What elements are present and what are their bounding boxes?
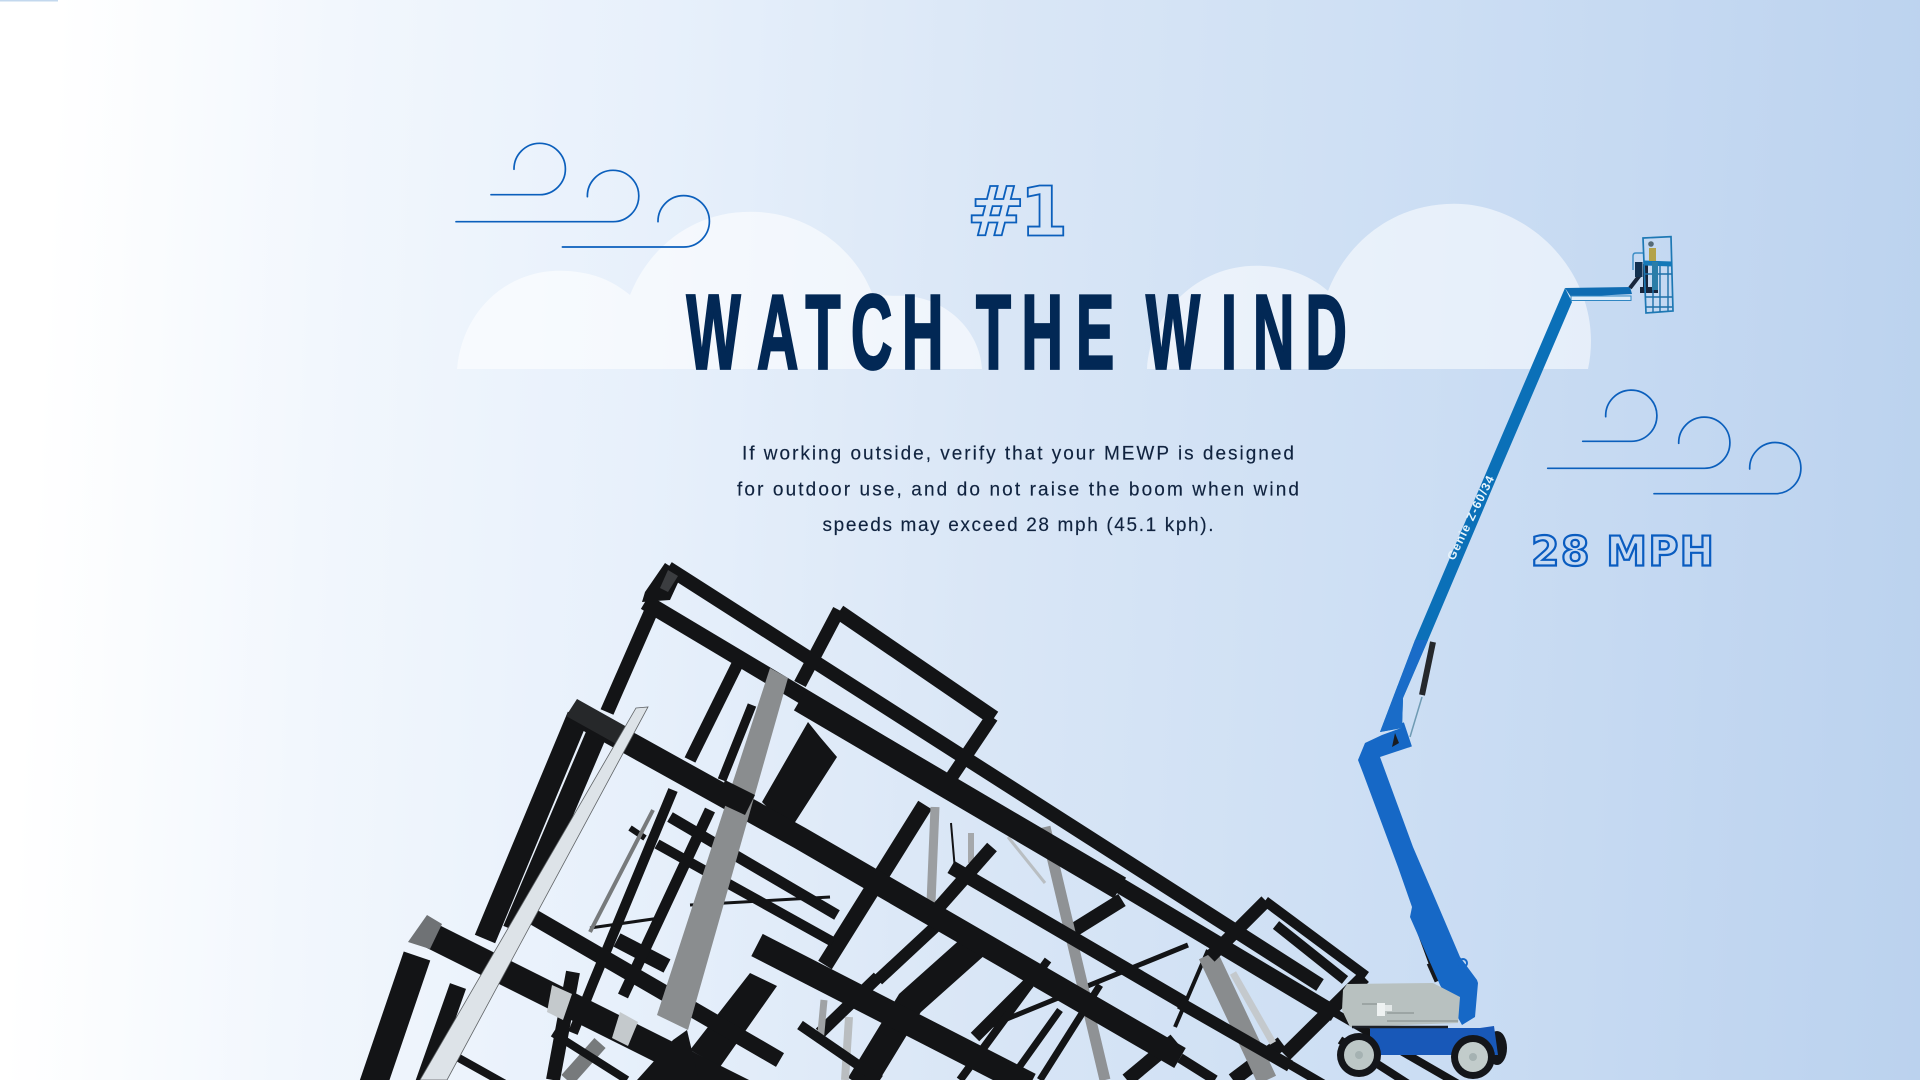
wind speed label: 28 MPH (1531, 528, 1714, 576)
steel: corner gussets (408, 563, 682, 1046)
steel: light galvanized strut (420, 707, 648, 1080)
body text: If working outside, verify that your MEWP is designed (742, 443, 1294, 464)
steel: dark joint plates over strut (637, 780, 755, 1080)
steel: main beams (430, 568, 1335, 1080)
lift: boom lift machine (1337, 237, 1673, 1079)
icon: wind swirls left (456, 143, 709, 247)
heading number: #1: #1 (967, 172, 1068, 252)
lift: basket and operator (1630, 237, 1673, 313)
steel: background braces (590, 805, 1460, 1080)
steel: gray vertical struts (567, 807, 1273, 1080)
steel structure (373, 563, 1460, 1080)
cloud: left (457, 212, 982, 369)
steel: upper rectangular frame (800, 610, 994, 790)
body text (737, 443, 1299, 536)
lift: upper cylinder (1410, 642, 1433, 737)
lift: jib arm (1565, 287, 1632, 300)
lift: lower boom (1358, 727, 1478, 1025)
steel: right small frame (1210, 901, 1366, 1055)
lift: boom model text: Genie Z-60/34 (1444, 473, 1497, 562)
steel: gray main strut (657, 668, 788, 1030)
lift: engine housing (1342, 983, 1460, 1027)
body text: for outdoor use, and do not raise the boom when wind (737, 479, 1299, 500)
lift: chassis wheels (1337, 1026, 1507, 1079)
title: WATCH THE WIND (687, 274, 1347, 392)
lift: boom joint (1392, 723, 1467, 967)
lift: lower cylinder (1414, 920, 1438, 981)
cloud: right (1147, 204, 1591, 369)
icon: wind swirls right (1548, 390, 1801, 494)
steel: columns (373, 607, 992, 1080)
lift: upper boom (1380, 288, 1572, 732)
steel: solid dark plates (665, 722, 837, 1080)
body text: speeds may exceed 28 mph (45.1 kph). (822, 515, 1214, 536)
